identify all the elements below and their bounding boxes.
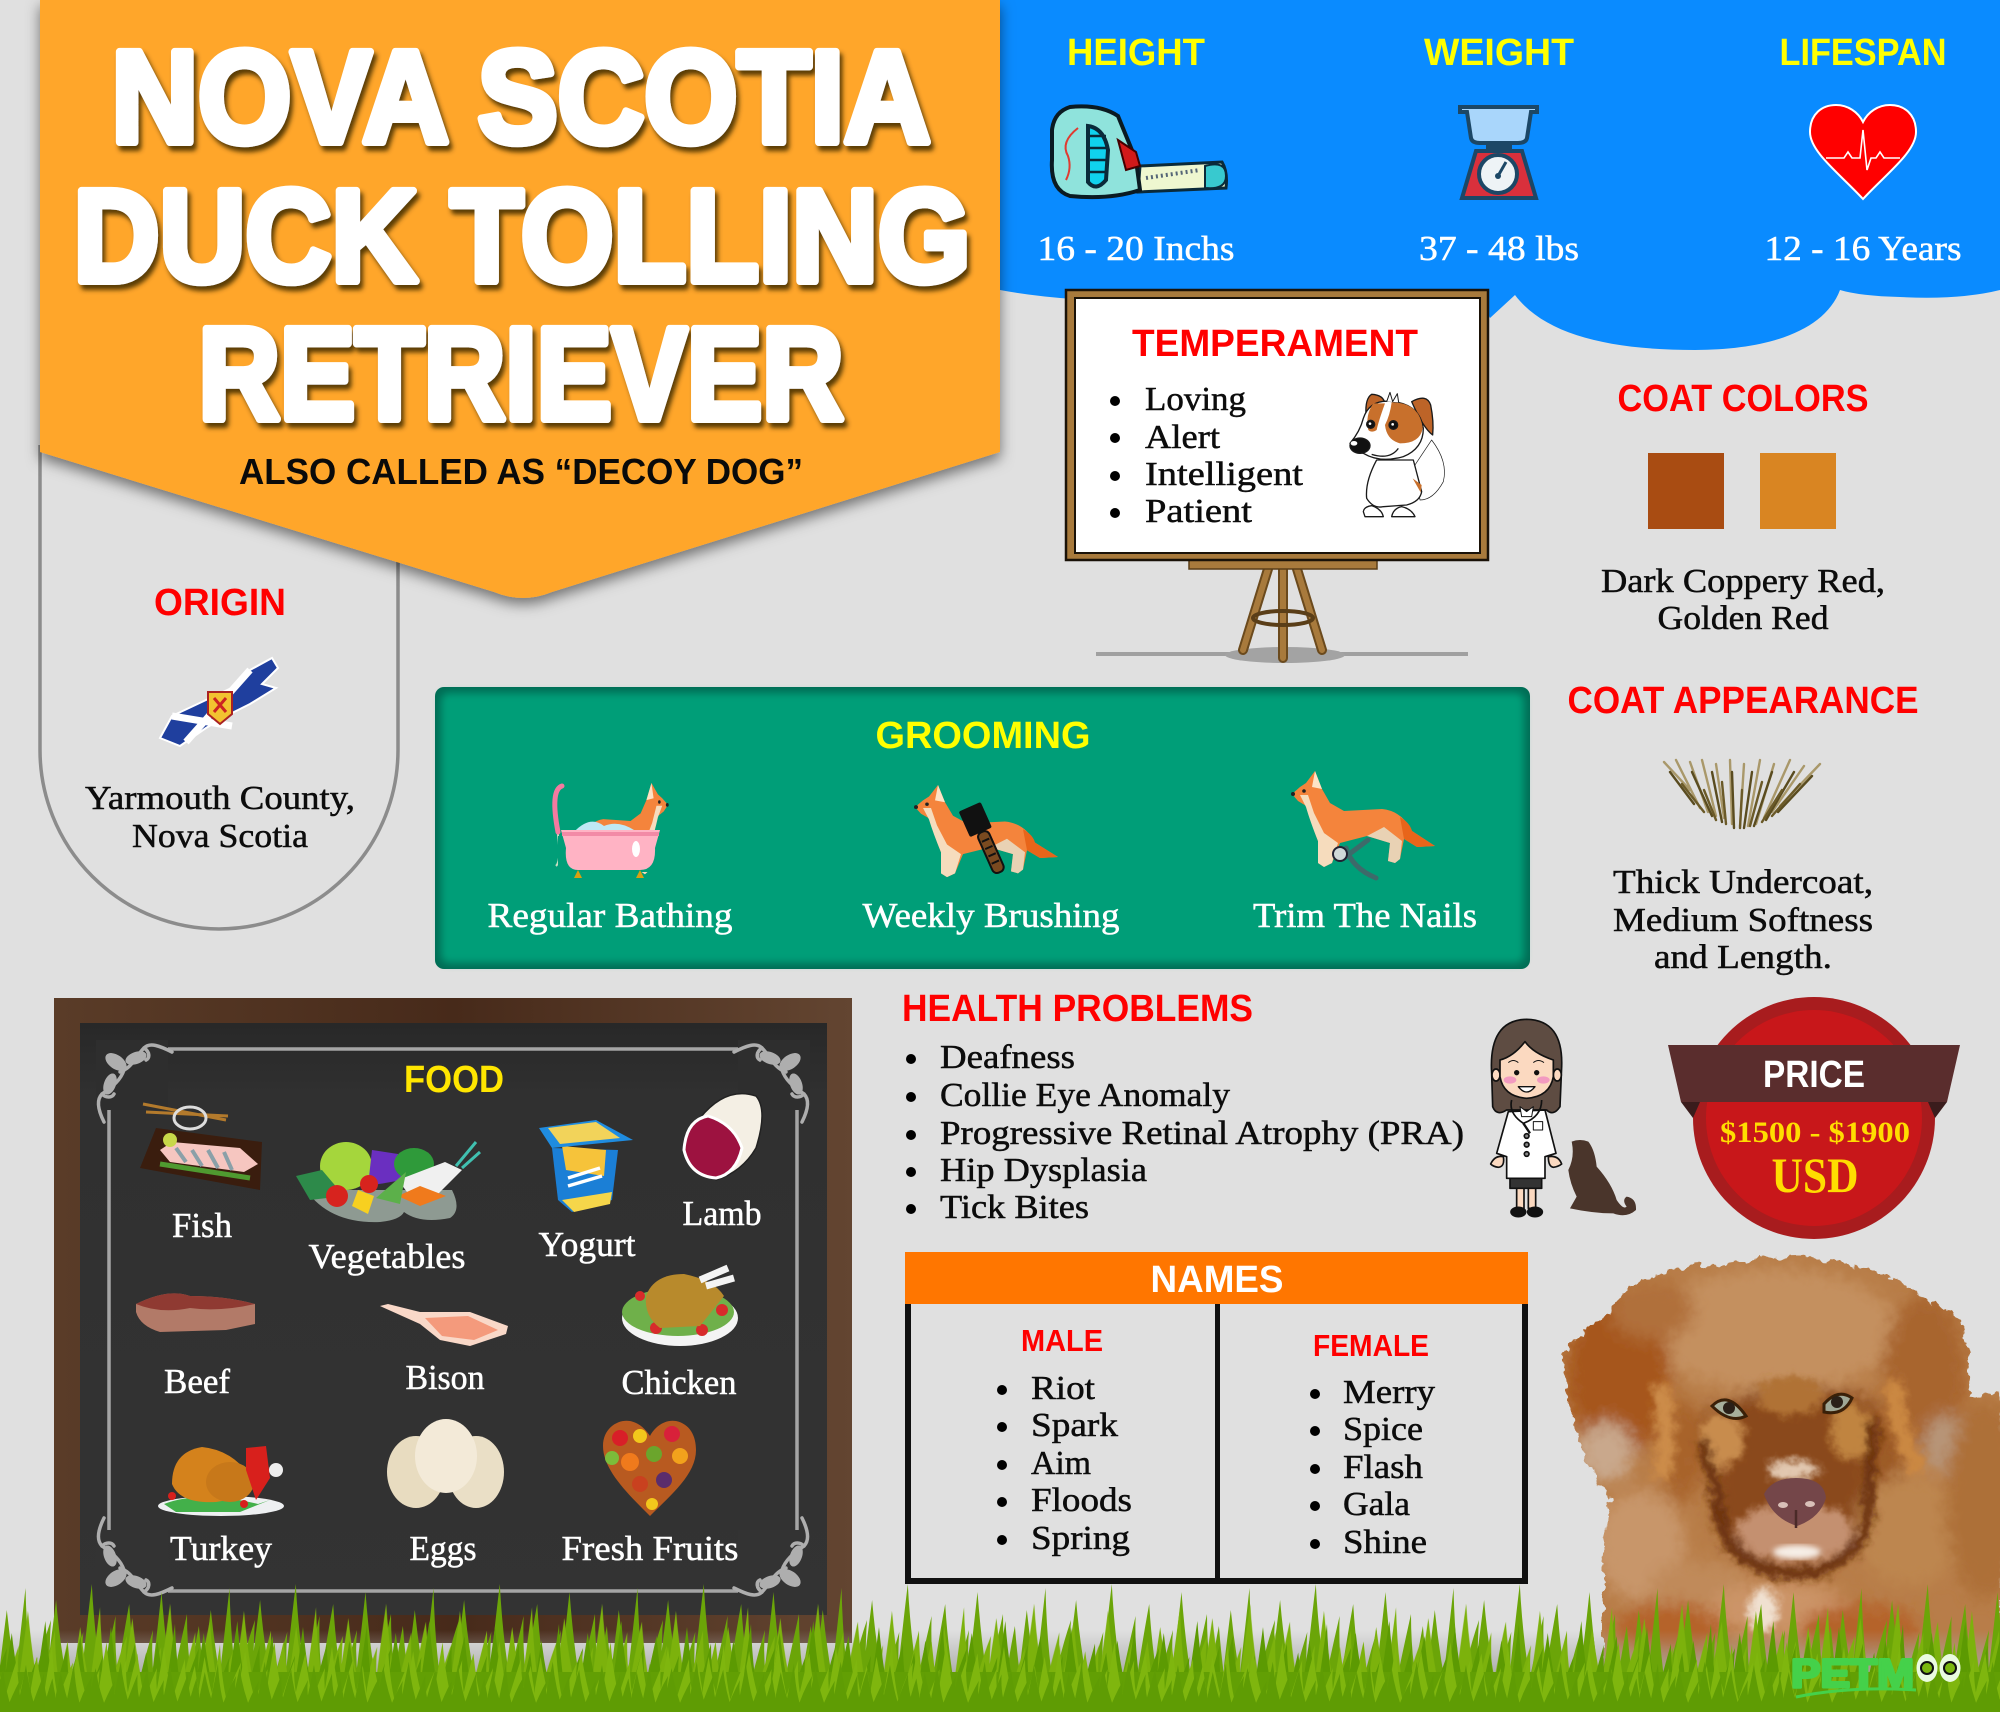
item: turkey bbox=[158, 1446, 284, 1568]
swatch: golden red bbox=[1760, 453, 1836, 529]
column: male names: Aim bbox=[1031, 1445, 1091, 1482]
text: origin location bbox=[85, 780, 355, 855]
item: lamb bbox=[682, 1094, 762, 1233]
column: female names: FEMALE bbox=[1313, 1328, 1429, 1363]
list: health problems: Hip Dysplasia bbox=[940, 1152, 1147, 1189]
heading: origin: ORIGIN bbox=[154, 582, 286, 624]
item: weekly brushing bbox=[862, 785, 1120, 935]
panel: title banner bbox=[40, 0, 1000, 598]
text: coat description: Medium Softness bbox=[1613, 902, 1873, 939]
item: yogurt: Yogurt bbox=[538, 1225, 636, 1264]
text: coat description: Thick Undercoat, bbox=[1613, 864, 1873, 901]
puppy face bbox=[1712, 1394, 1852, 1559]
item: trim the nails bbox=[1253, 771, 1477, 935]
list: temperament traits: Patient bbox=[1145, 493, 1253, 530]
icon: fruit heart bbox=[603, 1421, 696, 1516]
item: turkey: Turkey bbox=[170, 1529, 273, 1568]
stat: height: HEIGHT bbox=[1067, 32, 1205, 74]
stat: weight: 37 - 48 lbs bbox=[1419, 229, 1579, 268]
item: yogurt bbox=[538, 1120, 636, 1264]
text: coat color names: Golden Red bbox=[1658, 600, 1828, 637]
item: vegetables: Vegetables bbox=[308, 1237, 466, 1276]
panel: price badge bbox=[1668, 997, 1960, 1239]
column: male names: Spring bbox=[1031, 1520, 1130, 1557]
grass bbox=[0, 1580, 2000, 1712]
illustration: puppy portrait bbox=[1561, 1254, 2000, 1672]
list: health problems: Tick Bites bbox=[940, 1189, 1089, 1226]
title: RETRIEVER bbox=[198, 300, 844, 447]
text: coat description bbox=[1613, 864, 1873, 976]
item: beef bbox=[136, 1293, 255, 1401]
item: vegetables bbox=[296, 1142, 480, 1276]
heading: coat colors: COAT COLORS bbox=[1618, 378, 1868, 420]
item: fresh fruits: Fresh Fruits bbox=[562, 1529, 738, 1568]
column: female names: Gala bbox=[1343, 1486, 1410, 1523]
panel: food chalkboard bbox=[54, 998, 852, 1643]
column: female names: Shine bbox=[1343, 1524, 1427, 1561]
panel: grooming bbox=[435, 687, 1530, 969]
icon: roast turkey bbox=[158, 1446, 284, 1516]
column: female names: Spice bbox=[1343, 1411, 1423, 1448]
icon: beef steak bbox=[136, 1293, 255, 1332]
icon: Nova Scotia map bbox=[160, 658, 278, 746]
column: male names: Floods bbox=[1031, 1482, 1132, 1519]
list: temperament traits: Alert bbox=[1145, 419, 1221, 456]
panel: names bbox=[905, 1252, 1528, 1582]
logo: petmoo bbox=[1791, 1652, 1960, 1697]
column: female names bbox=[1310, 1328, 1435, 1561]
icon: eggs bbox=[387, 1419, 504, 1508]
column: male names: MALE bbox=[1021, 1323, 1103, 1358]
column: male names bbox=[997, 1323, 1132, 1557]
column: female names: Flash bbox=[1343, 1449, 1423, 1486]
list: health problems: Deafness bbox=[940, 1039, 1075, 1076]
heading: names: NAMES bbox=[1150, 1259, 1284, 1301]
text: origin location: Yarmouth County, bbox=[85, 780, 355, 817]
heading: health problems: HEALTH PROBLEMS bbox=[902, 988, 1253, 1030]
icon: dog in bath bbox=[555, 783, 669, 878]
item: fish bbox=[140, 1104, 262, 1245]
icon: dog with brush bbox=[914, 785, 1058, 877]
text: origin location: Nova Scotia bbox=[132, 818, 308, 855]
swatch: dark coppery red bbox=[1648, 453, 1724, 529]
heading: food: FOOD bbox=[404, 1059, 504, 1101]
panel: origin bbox=[40, 445, 398, 929]
stat: height: 16 - 20 Inchs bbox=[1038, 229, 1234, 268]
text: coat color names: Dark Coppery Red, bbox=[1601, 563, 1885, 600]
icon: yogurt cup bbox=[539, 1120, 633, 1212]
panel: health problems bbox=[902, 988, 1636, 1226]
item: bison: Bison bbox=[406, 1358, 484, 1397]
icon: kitchen scale bbox=[1460, 107, 1537, 198]
item: lamb: Lamb bbox=[682, 1194, 762, 1233]
item: regular bathing: Regular Bathing bbox=[488, 896, 732, 935]
item: eggs: Eggs bbox=[410, 1529, 476, 1568]
list: temperament traits: Loving bbox=[1145, 381, 1246, 418]
text: coat description: and Length. bbox=[1654, 939, 1832, 976]
stat: weight bbox=[1419, 32, 1579, 268]
stat: height bbox=[1038, 32, 1234, 268]
icon: heart with pulse bbox=[1810, 105, 1916, 199]
price currency: USD bbox=[1772, 1147, 1858, 1203]
icon: fish platter bbox=[140, 1104, 262, 1190]
item: trim the nails: Trim The Nails bbox=[1253, 896, 1477, 935]
stat: weight: WEIGHT bbox=[1424, 32, 1574, 74]
item: chicken bbox=[622, 1268, 738, 1402]
panel: coat colors bbox=[1601, 378, 1885, 637]
panel: stats band bbox=[1000, 0, 2000, 350]
panel: temperament easel bbox=[1066, 290, 1488, 663]
price range: $1500 - $1900 bbox=[1720, 1116, 1910, 1149]
list: temperament traits bbox=[1110, 381, 1304, 530]
logo: petmoo: PETM bbox=[1791, 1652, 1914, 1696]
item: beef: Beef bbox=[164, 1362, 230, 1401]
heading: temperament: TEMPERAMENT bbox=[1132, 323, 1418, 365]
item: bison bbox=[380, 1304, 508, 1397]
column: male names: Spark bbox=[1031, 1407, 1118, 1444]
list: temperament traits: Intelligent bbox=[1145, 456, 1304, 493]
board frame bbox=[1066, 290, 1488, 560]
list: health problems bbox=[906, 1039, 1464, 1226]
item: regular bathing bbox=[488, 783, 732, 935]
title: NOVA SCOTIA bbox=[112, 23, 930, 170]
subtitle: ALSO CALLED AS “DECOY DOG” bbox=[239, 451, 803, 492]
icon: vegetable bowl bbox=[296, 1142, 480, 1222]
title: DUCK TOLLING bbox=[74, 162, 970, 309]
item: chicken: Chicken bbox=[622, 1363, 736, 1402]
panel: coat appearance bbox=[1568, 680, 1918, 976]
stat: lifespan bbox=[1764, 32, 1962, 268]
title bbox=[74, 23, 970, 447]
icon: fur tuft bbox=[1664, 760, 1820, 828]
item: fresh fruits bbox=[562, 1421, 738, 1568]
heading: coat appearance: COAT APPEARANCE bbox=[1568, 680, 1918, 722]
heading: grooming: GROOMING bbox=[876, 715, 1090, 757]
icon: cartoon dog bbox=[1350, 392, 1444, 517]
icon: dog with clippers bbox=[1291, 771, 1435, 878]
list: health problems: Collie Eye Anomaly bbox=[940, 1077, 1230, 1114]
easel stand bbox=[1096, 558, 1468, 663]
icon: chicken platter bbox=[622, 1268, 738, 1346]
stat: lifespan: 12 - 16 Years bbox=[1764, 229, 1962, 268]
icon: veterinarian with dog bbox=[1491, 1019, 1636, 1217]
icon: tape measure bbox=[1052, 106, 1226, 197]
item: weekly brushing: Weekly Brushing bbox=[862, 896, 1120, 935]
price heading: PRICE bbox=[1763, 1054, 1865, 1096]
column: female names: Merry bbox=[1343, 1374, 1435, 1411]
stat: lifespan: LIFESPAN bbox=[1780, 32, 1946, 74]
column: male names: Riot bbox=[1031, 1370, 1096, 1407]
item: fish: Fish bbox=[172, 1206, 232, 1245]
item: eggs bbox=[387, 1419, 504, 1568]
icon: lamb roast bbox=[684, 1094, 762, 1180]
list: health problems: Progressive Retinal Atrophy (PRA) bbox=[940, 1115, 1464, 1152]
ribbon bbox=[1668, 1045, 1960, 1102]
text: coat color names bbox=[1601, 563, 1885, 637]
icon: bison cut bbox=[380, 1304, 508, 1346]
